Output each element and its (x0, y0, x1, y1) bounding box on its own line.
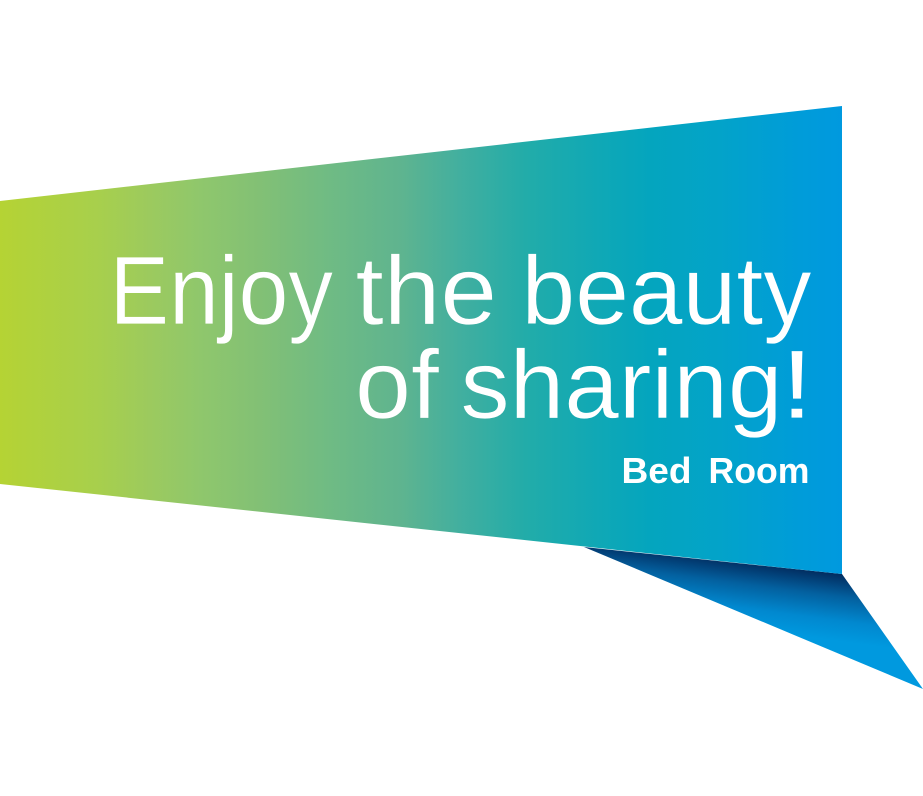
heading: the (356, 236, 497, 345)
heading: sharing (460, 330, 782, 439)
banner fold tail (584, 547, 923, 689)
heading: ! (780, 330, 814, 439)
subheading: Bed Room (622, 450, 810, 491)
banner panel (0, 106, 842, 574)
subheading: Bed Room: Room (708, 450, 810, 491)
subheading: Bed Room: Bed (622, 450, 692, 491)
heading: of (355, 330, 440, 439)
heading: Enjoy (110, 236, 333, 345)
heading (110, 236, 814, 439)
heading: beauty (522, 236, 812, 345)
